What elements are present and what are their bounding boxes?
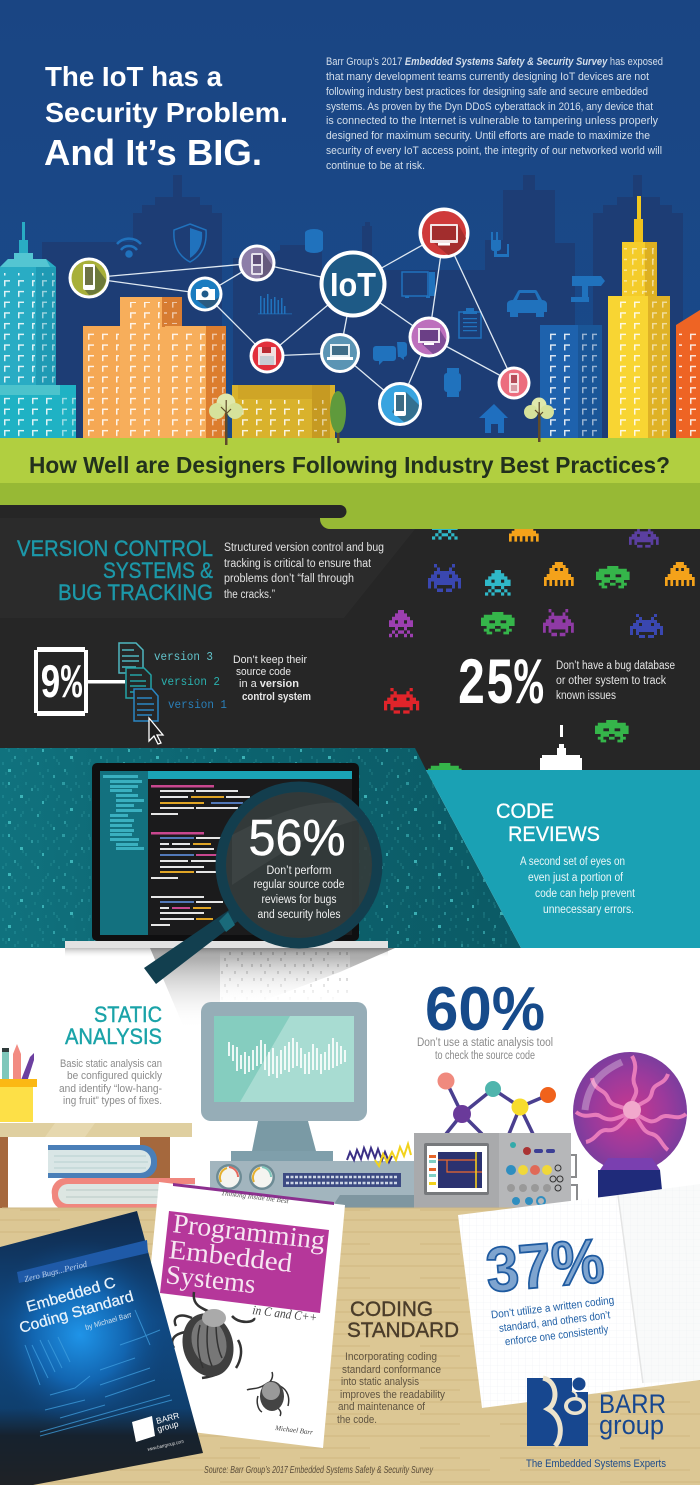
version control text: the cracks.” <box>224 589 275 601</box>
dark panel: version control <box>0 505 700 770</box>
icon: smartwatch <box>444 368 461 397</box>
heading: coding standard: STANDARD <box>347 1319 459 1342</box>
title <box>44 61 288 173</box>
version control text <box>224 542 384 601</box>
heading: version control: VERSION CONTROL <box>17 536 213 561</box>
stat text: bug database: or other system to track <box>556 675 666 687</box>
heading: version control <box>17 536 213 605</box>
stat text: version control: source code <box>236 666 291 678</box>
icon: bar chart <box>258 294 292 314</box>
icon: large tick <box>172 1292 254 1382</box>
notebook with 37 percent: Don’t utilize a written coding <box>490 1295 615 1322</box>
console with gauges <box>210 1161 415 1211</box>
text: code reviews: A second set of eyes on <box>520 856 625 868</box>
notebook with 37 percent: standard, and others don’t <box>498 1309 611 1335</box>
white section background <box>0 948 700 1210</box>
title: The IoT has a <box>45 61 222 92</box>
title: And It’s BIG. <box>44 132 262 173</box>
stat: 60 percent: Don’t use a static analysis tool <box>417 1037 553 1049</box>
stat text: bug database <box>556 660 675 702</box>
stat text: version control: control system <box>242 691 311 703</box>
text: coding standard: improves the readability <box>340 1389 445 1401</box>
heading: version control: SYSTEMS & <box>103 558 213 583</box>
node: olive phone <box>68 258 110 298</box>
text: static analysis <box>59 1058 162 1107</box>
icon: car <box>507 290 547 317</box>
intro text <box>326 56 663 172</box>
logo: Barr Group: The Embedded Systems Experts <box>526 1458 666 1470</box>
notebook with 37 percent: enforce one consistently <box>504 1324 609 1348</box>
stat: 56 percent: regular source code <box>254 879 344 891</box>
stat: 56 percent: Don’t perform <box>266 865 332 877</box>
building: teal tower <box>0 222 76 438</box>
building: orange block <box>83 297 226 438</box>
icon: cctv camera <box>571 276 605 302</box>
book: Embedded C Coding Standard: www.barrgroup.com <box>147 1439 185 1453</box>
stat text: version control: Don’t keep their <box>233 654 307 666</box>
heading: static analysis: STATIC <box>94 1002 162 1027</box>
book: Programming Embedded Systems: Systems <box>164 1259 257 1299</box>
book: Embedded C Coding Standard: Embedded C <box>24 1274 118 1316</box>
green ledge with dark blob cap <box>0 500 700 529</box>
book: Programming Embedded Systems: Michael Barr <box>274 1424 314 1437</box>
icon: books <box>48 1145 195 1210</box>
title: Security Problem. <box>45 97 288 128</box>
icon: chat bubbles <box>373 342 407 365</box>
icon: wifi <box>117 239 141 256</box>
intro text: designed for maximum security. Until efforts are made to maximize the <box>326 130 650 142</box>
wood desk <box>0 1208 700 1485</box>
version labels: version 3 <box>154 651 213 664</box>
stat: 56 percent: reviews for bugs <box>262 894 337 906</box>
icon: oscilloscope <box>414 1133 577 1210</box>
source note: Source: Barr Group’s 2017 Embedded Systems Safety & Security Survey <box>204 1465 434 1476</box>
book: Programming Embedded Systems: in C and C++ <box>252 1302 318 1325</box>
heading: coding standard: CODING <box>350 1298 433 1321</box>
stat: 25 percent: 25% <box>457 648 543 723</box>
building: orange right <box>676 310 700 438</box>
node: floppy <box>250 338 284 374</box>
stat: 9 percent <box>34 647 125 716</box>
icon: molecule <box>438 1072 556 1134</box>
text: code reviews: even just a portion of <box>528 872 624 884</box>
icon: coil wires <box>347 1144 411 1166</box>
logo: Barr Group: group <box>599 1410 664 1440</box>
text: coding standard: and maintenance of <box>338 1401 426 1413</box>
table <box>0 1123 192 1210</box>
building: yellow tower <box>608 196 670 438</box>
stat: 60 percent: 60% <box>425 975 545 1044</box>
heading: How Well are Designers Following Industry Best Practices? <box>29 452 670 478</box>
stat: 56 percent: and security holes <box>258 909 341 921</box>
stat: 60 percent: to check the source code <box>435 1050 535 1062</box>
panel: code reviews <box>426 770 700 948</box>
node: red monitor <box>418 208 470 258</box>
node: IoT hub <box>320 250 386 318</box>
book: Embedded C Coding Standard <box>0 1211 205 1485</box>
node: blue phone <box>378 382 422 426</box>
background device icons <box>117 224 605 433</box>
stat text: version control <box>233 654 311 703</box>
intro text: security of every IoT access point, the integrity of our networked world will <box>326 145 662 157</box>
node: purple monitor <box>408 316 450 358</box>
icon: house <box>479 404 508 433</box>
green heading band <box>0 438 700 507</box>
text: static analysis: and identify “low-hang- <box>59 1083 162 1095</box>
node: camera <box>188 276 222 312</box>
text: coding standard <box>337 1351 445 1426</box>
heading: static analysis <box>65 1002 162 1049</box>
intro text: that many development teams currently designing IoT devices are not <box>326 71 649 83</box>
heading: code reviews: CODE <box>496 800 554 823</box>
icon: version documents <box>119 643 163 744</box>
version labels: version 2 <box>161 676 220 689</box>
icon: clipboard <box>459 308 481 338</box>
matrix band <box>0 748 521 948</box>
intro text: continue to be at risk. <box>326 160 425 172</box>
book: Embedded C Coding Standard: BARR <box>155 1410 180 1426</box>
version labels <box>154 651 227 712</box>
stat: 56 percent: 56% <box>248 809 346 866</box>
notebook with 37 percent: 37% <box>483 1226 607 1306</box>
icon: microwave <box>402 272 435 298</box>
heading: code reviews <box>496 800 600 846</box>
stat text: bug database: known issues <box>556 690 616 702</box>
icon: small tick <box>247 1372 289 1416</box>
version labels: version 1 <box>168 699 227 712</box>
heading: code reviews: REVIEWS <box>508 823 600 846</box>
icon: plug <box>491 232 509 257</box>
icon: monitor <box>201 1002 367 1161</box>
node: IoT hub: IoT <box>330 266 376 303</box>
text: code reviews: code can help prevent <box>535 888 636 900</box>
text: code reviews <box>520 856 636 916</box>
book: Embedded C Coding Standard: by Michael Barr <box>84 1310 133 1332</box>
book: Embedded C Coding Standard: Zero Bugs...Period <box>23 1258 89 1284</box>
laptop with code <box>65 763 388 948</box>
icon: pixel cannon <box>540 725 582 770</box>
text: coding standard: standard conformance <box>342 1364 441 1376</box>
text: static analysis: Basic static analysis can <box>60 1058 162 1070</box>
heading: static analysis: ANALYSIS <box>65 1024 162 1049</box>
book: Programming Embedded Systems: Programming <box>171 1208 327 1255</box>
text: coding standard: into static analysis <box>341 1376 419 1388</box>
city silhouette <box>42 175 683 438</box>
node: pink phone <box>498 366 530 400</box>
building: blue <box>540 325 602 438</box>
stat: 56 percent <box>248 809 346 921</box>
icon: magnifying glass <box>144 787 377 984</box>
text: static analysis: be configured quickly <box>67 1070 162 1082</box>
notebook with 37 percent <box>458 1184 700 1408</box>
book: Programming Embedded Systems: Thinking Inside the Best <box>221 1189 290 1205</box>
book: Embedded C Coding Standard: Coding Standard <box>17 1288 136 1337</box>
invaders <box>384 514 695 785</box>
trees <box>209 391 554 445</box>
icon: plasma ball <box>573 1052 687 1210</box>
intro text: is connected to the Internet is vulnerable to tampering unless properly <box>326 115 658 127</box>
icon: pencil cup <box>0 1044 37 1122</box>
version control text: Structured version control and bug <box>224 542 384 554</box>
version control text: problems don’t “fall through <box>224 573 354 585</box>
building: low yellow <box>232 385 335 438</box>
intro text: following industry best practices for designing safe and secure embedded <box>326 86 648 98</box>
intro text: Barr Group’s 2017 Embedded Systems Safety & Security Survey has exposed <box>326 56 663 68</box>
logo: Barr Group: BARR <box>599 1389 666 1419</box>
icon: shield <box>174 224 206 262</box>
text: coding standard: Incorporating coding <box>345 1351 437 1363</box>
book: Programming Embedded Systems <box>135 1182 345 1448</box>
stat text: bug database: Don’t have a bug database <box>556 660 675 672</box>
faded matrix code <box>220 950 350 1002</box>
stat text: version control: in a version <box>239 678 299 690</box>
book: Embedded C Coding Standard: group <box>156 1419 180 1434</box>
text: coding standard: the code. <box>337 1414 377 1426</box>
node: grey phone <box>238 244 276 282</box>
version control text: tracking is critical to ensure that <box>224 558 372 570</box>
intro text: systems. As proven by the Dyn DDoS cyberattack in 2016, any device that <box>326 101 653 113</box>
heading: coding standard <box>347 1298 459 1342</box>
icon: database <box>305 229 323 253</box>
network links <box>89 233 514 404</box>
heading: version control: BUG TRACKING <box>58 580 213 605</box>
sky background <box>0 0 700 438</box>
text: code reviews: unnecessary errors. <box>543 904 634 916</box>
logo: Barr Group <box>526 1378 666 1470</box>
node: laptop <box>320 333 360 373</box>
stat: 9 percent: 9% <box>40 658 82 712</box>
text: static analysis: ing fruit” types of fixes. <box>63 1095 162 1107</box>
book: Programming Embedded Systems: Embedded <box>167 1234 294 1278</box>
